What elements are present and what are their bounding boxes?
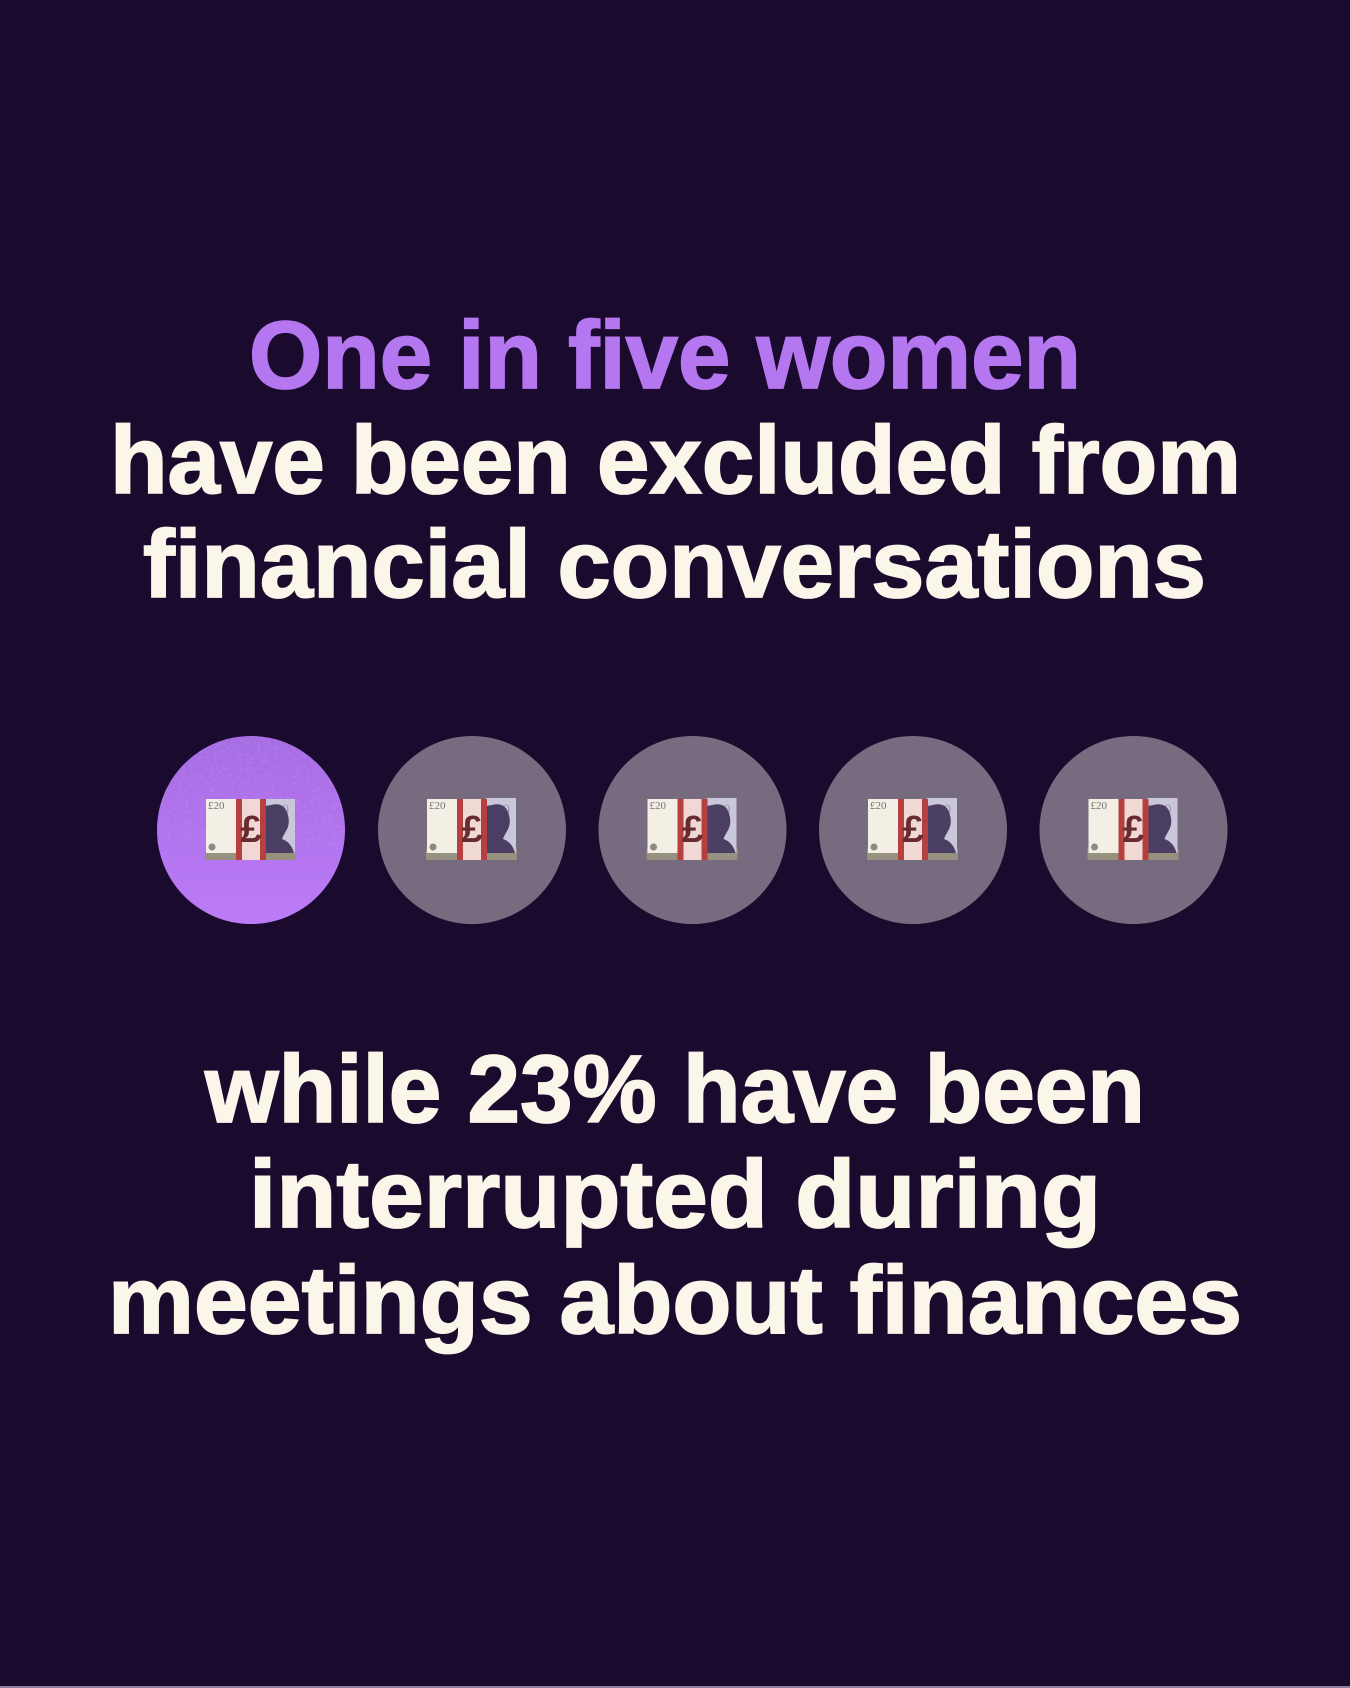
highlighted purple circle with banknote: 20: [274, 802, 289, 818]
grey circle with banknote 2: 20: [495, 802, 510, 818]
headline line two: have been excluded from: [110, 407, 1241, 514]
pictogram row: one in five: [157, 736, 1228, 924]
statement: 23% interrupted: [108, 1036, 1242, 1354]
grey circle with banknote 4: 20: [936, 802, 951, 818]
grey circle with banknote 5: 20: [1156, 802, 1172, 818]
heading: one in five women: [110, 302, 1241, 618]
grey circle with banknote 5: £: [1123, 809, 1144, 851]
grey circle with banknote 4: [819, 736, 1007, 924]
grey circle with banknote 4: £: [902, 809, 924, 851]
headline line three: financial conversations: [143, 511, 1206, 618]
grey circle with banknote 3: [598, 736, 786, 924]
grey circle with banknote 4: £20: [870, 800, 887, 812]
grey circle with banknote 2: £20: [429, 800, 446, 812]
statement line three: meetings about finances: [108, 1247, 1242, 1354]
grey circle with banknote 3: £20: [650, 800, 666, 812]
highlighted purple circle with banknote: £20: [208, 800, 225, 812]
grey circle with banknote 2: [378, 736, 566, 924]
statement line two: interrupted during: [249, 1141, 1101, 1248]
highlighted headline line: One in five women: [249, 302, 1081, 409]
highlighted purple circle with banknote: [157, 736, 345, 924]
grey circle with banknote 5: [1040, 736, 1228, 924]
grey circle with banknote 3: 20: [716, 802, 730, 818]
statement line one: while 23% have been: [204, 1036, 1145, 1143]
grey circle with banknote 2: £: [461, 809, 483, 851]
grey circle with banknote 5: £20: [1090, 800, 1108, 812]
grey circle with banknote 3: £: [682, 809, 703, 851]
highlighted purple circle with banknote: £: [240, 809, 262, 851]
